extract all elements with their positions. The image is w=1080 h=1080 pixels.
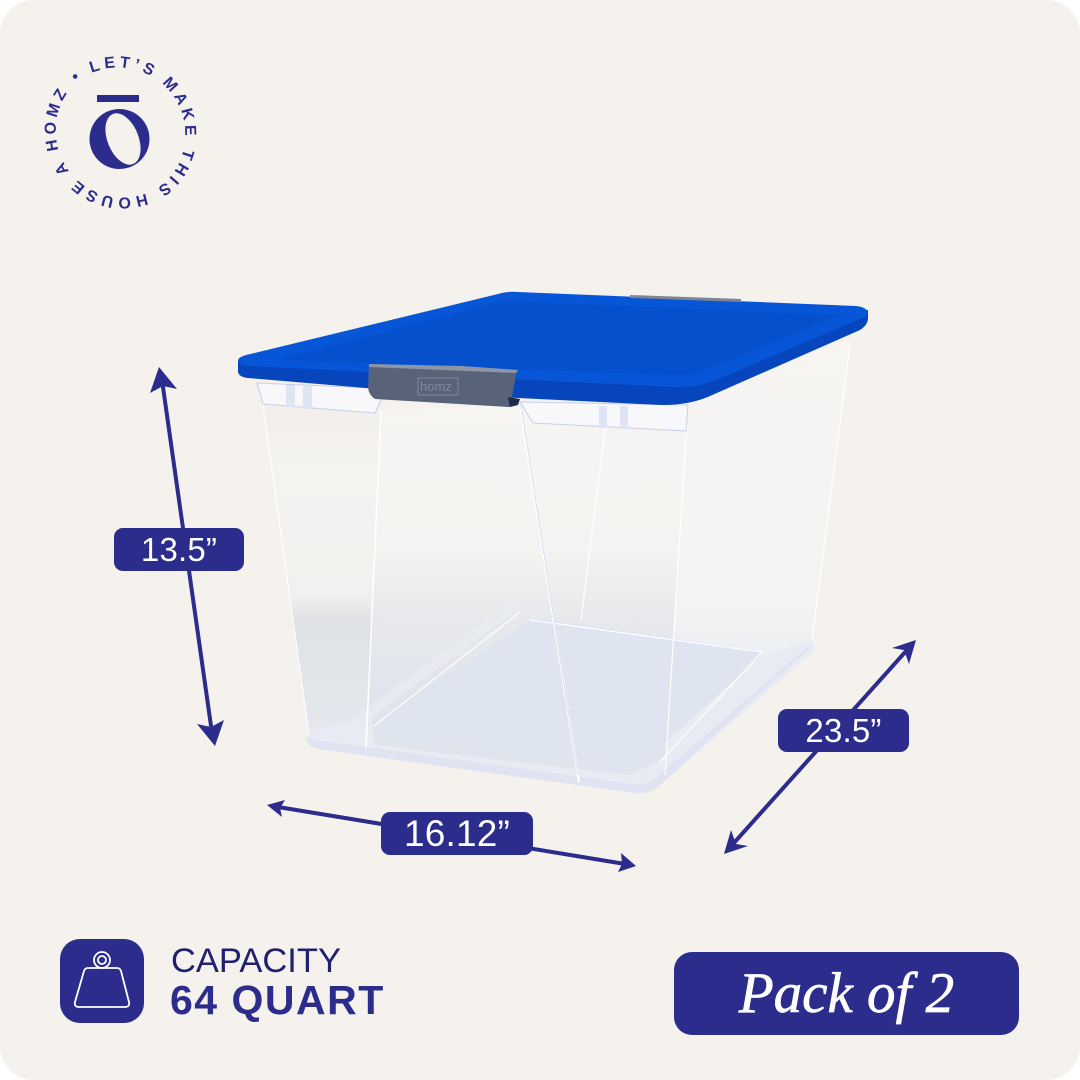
blue lid	[238, 292, 868, 405]
icon: capacity weight	[60, 939, 144, 1023]
dimension label: width: 16.12”	[404, 812, 510, 854]
dimension label: width	[381, 812, 533, 855]
logo: circular brand seal: • LET’S MAKE THIS HOUSE A HOMZ	[44, 56, 196, 209]
dimension label: depth: 23.5”	[805, 712, 882, 748]
pack of 2 banner	[674, 952, 1019, 1035]
capacity text: CAPACITY	[171, 942, 341, 980]
arrow: height	[150, 367, 224, 746]
lid latch	[368, 364, 520, 407]
tote floor	[375, 619, 760, 770]
capacity text	[170, 942, 385, 1023]
dimension label: depth	[778, 709, 909, 752]
tote rim handles	[257, 383, 688, 431]
pack of 2 banner: Pack of 2	[739, 962, 954, 1025]
arrow: width	[267, 800, 636, 872]
tote body	[262, 340, 850, 793]
capacity text: 64 QUART	[170, 977, 385, 1023]
lid latch: homz	[420, 379, 452, 394]
arrow: depth	[724, 640, 916, 854]
dimension label: height: 13.5”	[141, 530, 217, 568]
dimension label: height	[114, 528, 244, 571]
